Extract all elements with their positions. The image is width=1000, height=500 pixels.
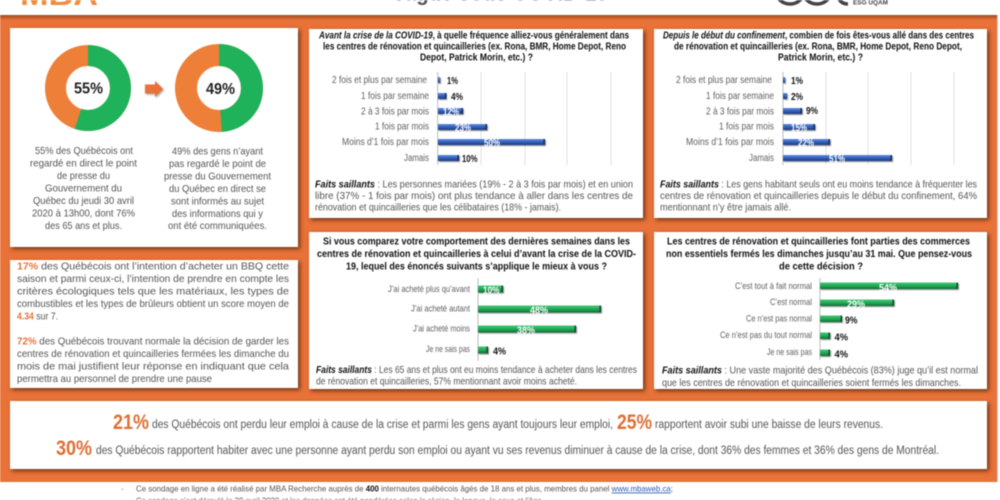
- callout: key facts: Faits saillants : Une vaste majorité des Québécois (83%) juge qu’il est normal: [662, 366, 978, 376]
- bar chart: 48%: [530, 306, 548, 316]
- bar chart: Je ne sais pas: [767, 347, 812, 357]
- bar chart: C’est tout à fait normal: [735, 281, 812, 291]
- heading: les centres de rénovation et quincailleries (ex. Rona, BMR, Home Depot, Reno: [323, 42, 626, 52]
- bar chart: Ce n’est pas du tout normal: [720, 330, 812, 340]
- heading: 19, lequel des énoncés suivants s’applique le mieux à vous ?: [346, 262, 607, 272]
- bar chart: 51%: [829, 154, 845, 165]
- heading: de cette décision ?: [779, 262, 863, 272]
- panel: employment facts: [10, 401, 987, 469]
- bar chart: 1 fois par mois: [719, 122, 774, 132]
- donut: 55%: 55%: [74, 80, 103, 98]
- bar chart: C’est normal: [770, 297, 812, 307]
- donut: 49%: 49%: [206, 81, 235, 98]
- text: 55% explanation: 55% des Québécois ont: [35, 146, 133, 157]
- callout: key facts: [316, 365, 637, 388]
- callout: key facts: Faits saillants : Les 65 ans et plus ont eu moins tendance à acheter dans les centres: [316, 365, 637, 376]
- callout: key facts: rénovation et quincailleries que les célibataires (18% - jamais).: [315, 202, 561, 214]
- bar chart: [720, 278, 958, 360]
- callout: key facts: de rénovation et quincailleries, 57% mentionnant avoir moins acheté.: [316, 376, 577, 388]
- heading: [663, 30, 974, 64]
- callout: key facts: centres de rénovation et quincailleries depuis le début du confinement, 64%: [660, 191, 977, 202]
- footnotes: -: [121, 484, 124, 494]
- text: 49% explanation: ont été communiquées.: [168, 221, 267, 232]
- text: 49% explanation: [164, 146, 271, 232]
- text: 49% explanation: presse du Gouvernement: [164, 172, 271, 182]
- bar chart: 10%: [483, 286, 500, 296]
- logo: ESG UQAM: [776, 0, 888, 6]
- text block: BBQ: 4.34 sur 7.: [17, 312, 58, 322]
- bar chart: 12%: [443, 107, 459, 118]
- text block: BBQ: 17% des Québécois ont l’intention d’acheter un BBQ cette: [17, 262, 289, 272]
- bar chart: 38%: [517, 326, 535, 336]
- heading: Depot, Patrick Morin, etc.) ?: [420, 52, 533, 64]
- text: 49% explanation: 49% des gens n’ayant: [172, 146, 263, 158]
- text: household income: [56, 437, 939, 460]
- bar chart: 29%: [847, 300, 865, 310]
- callout: key facts: [315, 180, 633, 214]
- text block: Sunday closure: permettra au personnel de prendre une pause: [17, 374, 212, 385]
- text block: Sunday closure: 72% des Québécois trouvant normale la décision de garder les: [17, 336, 289, 348]
- bar chart: 4%: [493, 346, 506, 358]
- heading: centres de rénovation et quincailleries à celui d’avant la crise de la COVID-: [317, 249, 636, 260]
- bar chart: Jamais: [404, 153, 429, 164]
- text: 55% explanation: [30, 146, 137, 232]
- donut: 55%: [56, 56, 120, 120]
- arrow: [145, 81, 163, 97]
- text: job loss: des Québécois ont perdu leur emploi à cause de la crise et parmi les gens ayant toujours leur emploi,: [152, 419, 613, 431]
- bar chart: 2 fois et plus par semaine: [676, 75, 772, 86]
- text block: BBQ: saison et parmi ceux-ci, l’intention de prendre en compte les: [17, 274, 289, 285]
- panel: press conference donuts: [10, 28, 298, 247]
- text: 49% explanation: pas regardé le point de: [169, 159, 266, 170]
- heading: Avant la crise de la COVID-19, à quelle fréquence alliez-vous généralement dans: [318, 30, 629, 42]
- text: 49% explanation: sont informés au sujet: [171, 196, 264, 208]
- bar chart: Moins d’1 fois par mois: [686, 137, 774, 148]
- text: job loss: rapportent avoir subi une baisse de leurs revenus.: [655, 419, 883, 431]
- bar chart: 23%: [455, 123, 471, 134]
- bar chart: 1%: [791, 76, 803, 87]
- heading: Patrick Morin, etc.) ?: [778, 52, 863, 64]
- bar chart: Moins d’1 fois par mois: [342, 137, 429, 148]
- heading: Si vous comparez votre comportement des dernières semaines dans les: [323, 236, 630, 248]
- panel: BBQ and Sunday closure facts: [10, 260, 298, 388]
- header: [20, 0, 888, 12]
- heading: [666, 236, 972, 272]
- panel: Sunday closing opinion: [654, 232, 987, 389]
- footnotes: [121, 484, 673, 500]
- callout: key facts: libre (37% - 1 fois par mois) ont plus tendance à aller dans les centres de: [315, 191, 633, 202]
- bar chart: 2 à 3 fois par mois: [706, 106, 774, 118]
- bar chart: 4%: [451, 92, 463, 103]
- text block: BBQ: combustibles et les types de brûleurs obtient un score moyen de: [17, 299, 289, 310]
- bar chart: Je ne sais pas: [426, 344, 470, 354]
- bar chart: Jamais: [749, 153, 774, 164]
- text: job loss: [113, 411, 883, 434]
- bar chart: 2%: [791, 92, 803, 103]
- bar chart: J’ai acheté plus qu’avant: [388, 284, 470, 294]
- bar chart: 1 fois par semaine: [361, 91, 429, 102]
- text block: Sunday closure: [17, 336, 289, 385]
- text: household income: 30%: [56, 437, 92, 460]
- text: 55% explanation: des 65 ans et plus.: [45, 221, 122, 232]
- bar chart: [676, 72, 954, 165]
- text: 55% explanation: regardé en direct le point: [30, 158, 137, 170]
- bar chart: 9%: [845, 316, 858, 326]
- bar chart: 4%: [834, 332, 848, 344]
- text block: Sunday closure: centres de rénovation et quincailleries fermées les dimanche du: [17, 349, 289, 360]
- donut: 49%: [186, 55, 252, 121]
- panel: buying behaviour: [309, 232, 643, 389]
- bar chart: [388, 278, 601, 361]
- heading: [317, 236, 636, 272]
- callout: key facts: Faits saillants : Les personnes mariées (19% - 2 à 3 fois par mois) et en union: [315, 180, 633, 190]
- callout: key facts: que les centres de rénovation et quincailleries soient fermés les dimanches.: [662, 378, 961, 389]
- bar chart: 1%: [447, 76, 458, 87]
- text block: BBQ: [17, 262, 289, 322]
- text: job loss: 25%: [617, 411, 652, 434]
- text: 55% explanation: Québec du jeudi 30 avril: [33, 196, 134, 207]
- bar chart: 9%: [806, 106, 818, 117]
- bar chart: 2 à 3 fois par mois: [361, 106, 429, 118]
- text: 55% explanation: 2020 à 13h00, dont 76%: [32, 208, 135, 220]
- bar chart: 1 fois par mois: [375, 122, 429, 132]
- bar chart: 15%: [791, 123, 807, 134]
- text block: Sunday closure: mois de mai justifient leur réponse en indiquant que cela: [17, 362, 289, 372]
- bar chart: J’ai acheté moins: [413, 324, 470, 334]
- callout: key facts: mentionnant n’y être jamais allé.: [660, 202, 791, 214]
- bar chart: 50%: [484, 138, 500, 149]
- text block: BBQ: critères écologiques tels que les matériaux, les types de: [17, 286, 289, 298]
- callout: key facts: [660, 180, 977, 214]
- text: 55% explanation: de presse du: [57, 171, 110, 182]
- bar chart: J’ai acheté autant: [411, 304, 470, 314]
- text: job loss: 21%: [113, 411, 149, 434]
- bar chart: 1 fois par semaine: [706, 91, 774, 102]
- text: 49% explanation: du Québec en direct se: [169, 184, 266, 195]
- footnotes: Ce sondage en ligne a été réalisé par MBA Recherche auprès de 400 internautes québécois âgés de 18 ans et plus, membres du panel www.mbaweb.ca;: [136, 484, 673, 494]
- panel: frequency during lockdown: [654, 29, 987, 218]
- bar chart: 4%: [834, 350, 848, 360]
- callout: key facts: [662, 366, 978, 389]
- heading: [318, 30, 629, 64]
- panel: frequency before COVID-19: [309, 29, 643, 218]
- bar chart: [332, 72, 611, 165]
- text: 55% explanation: Gouvernement du: [45, 184, 122, 194]
- bar chart: 2 fois et plus par semaine: [332, 75, 427, 86]
- bar chart: 10%: [462, 154, 478, 165]
- bar chart: 22%: [798, 138, 814, 149]
- bar chart: Ce n’est pas normal: [746, 314, 812, 324]
- bar chart: 54%: [879, 283, 897, 294]
- text: 49% explanation: des informations qui y: [172, 209, 264, 220]
- logo: ESG UQAM: ESG UQAM: [853, 0, 888, 6]
